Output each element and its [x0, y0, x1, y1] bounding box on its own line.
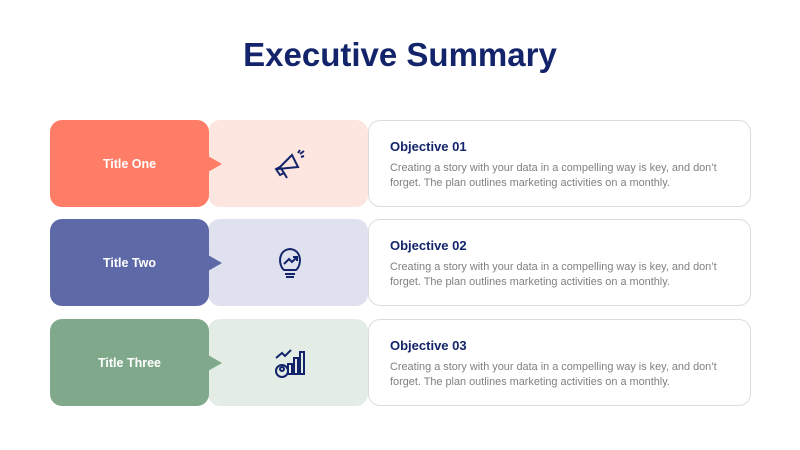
card: Objective 03 — [368, 319, 751, 406]
card: Objective 01 — [368, 120, 751, 207]
tag: Title One — [50, 120, 209, 207]
light panel 3 — [208, 319, 368, 406]
icon: lightbulb — [279, 248, 301, 278]
tag: Title Three: Title Three — [98, 356, 161, 370]
tag: Title One: Title One — [103, 156, 156, 170]
icon: megaphone — [274, 150, 304, 178]
row 2 — [50, 219, 751, 306]
icon: growth chart — [275, 349, 305, 378]
tag: Title Two — [50, 219, 209, 306]
light panel 1 — [208, 120, 368, 207]
tag: Title Two: Title Two — [103, 256, 156, 270]
card: Objective 02: Objective 02 — [390, 238, 467, 253]
card: Objective 02: Creating a story with your data in a compelling way is key, and don’t forget. The plan outlines marketing activities on a monthly. — [390, 261, 717, 288]
card: Objective 01: Objective 01 — [390, 139, 467, 154]
card: Objective 03: Objective 03 — [390, 338, 467, 353]
card: Objective 01: Creating a story with your data in a compelling way is key, and don’t forget. The plan outlines marketing activities on a monthly. — [390, 162, 717, 189]
card: Objective 02 — [368, 219, 751, 306]
card: Objective 03: Creating a story with your data in a compelling way is key, and don’t forget. The plan outlines marketing activities on a monthly. — [390, 361, 717, 388]
light panel 2 — [208, 219, 368, 306]
title: Executive Summary — [243, 36, 557, 73]
tag: Title Three — [50, 319, 209, 406]
row 3 — [50, 319, 751, 406]
row 1 — [50, 120, 751, 207]
